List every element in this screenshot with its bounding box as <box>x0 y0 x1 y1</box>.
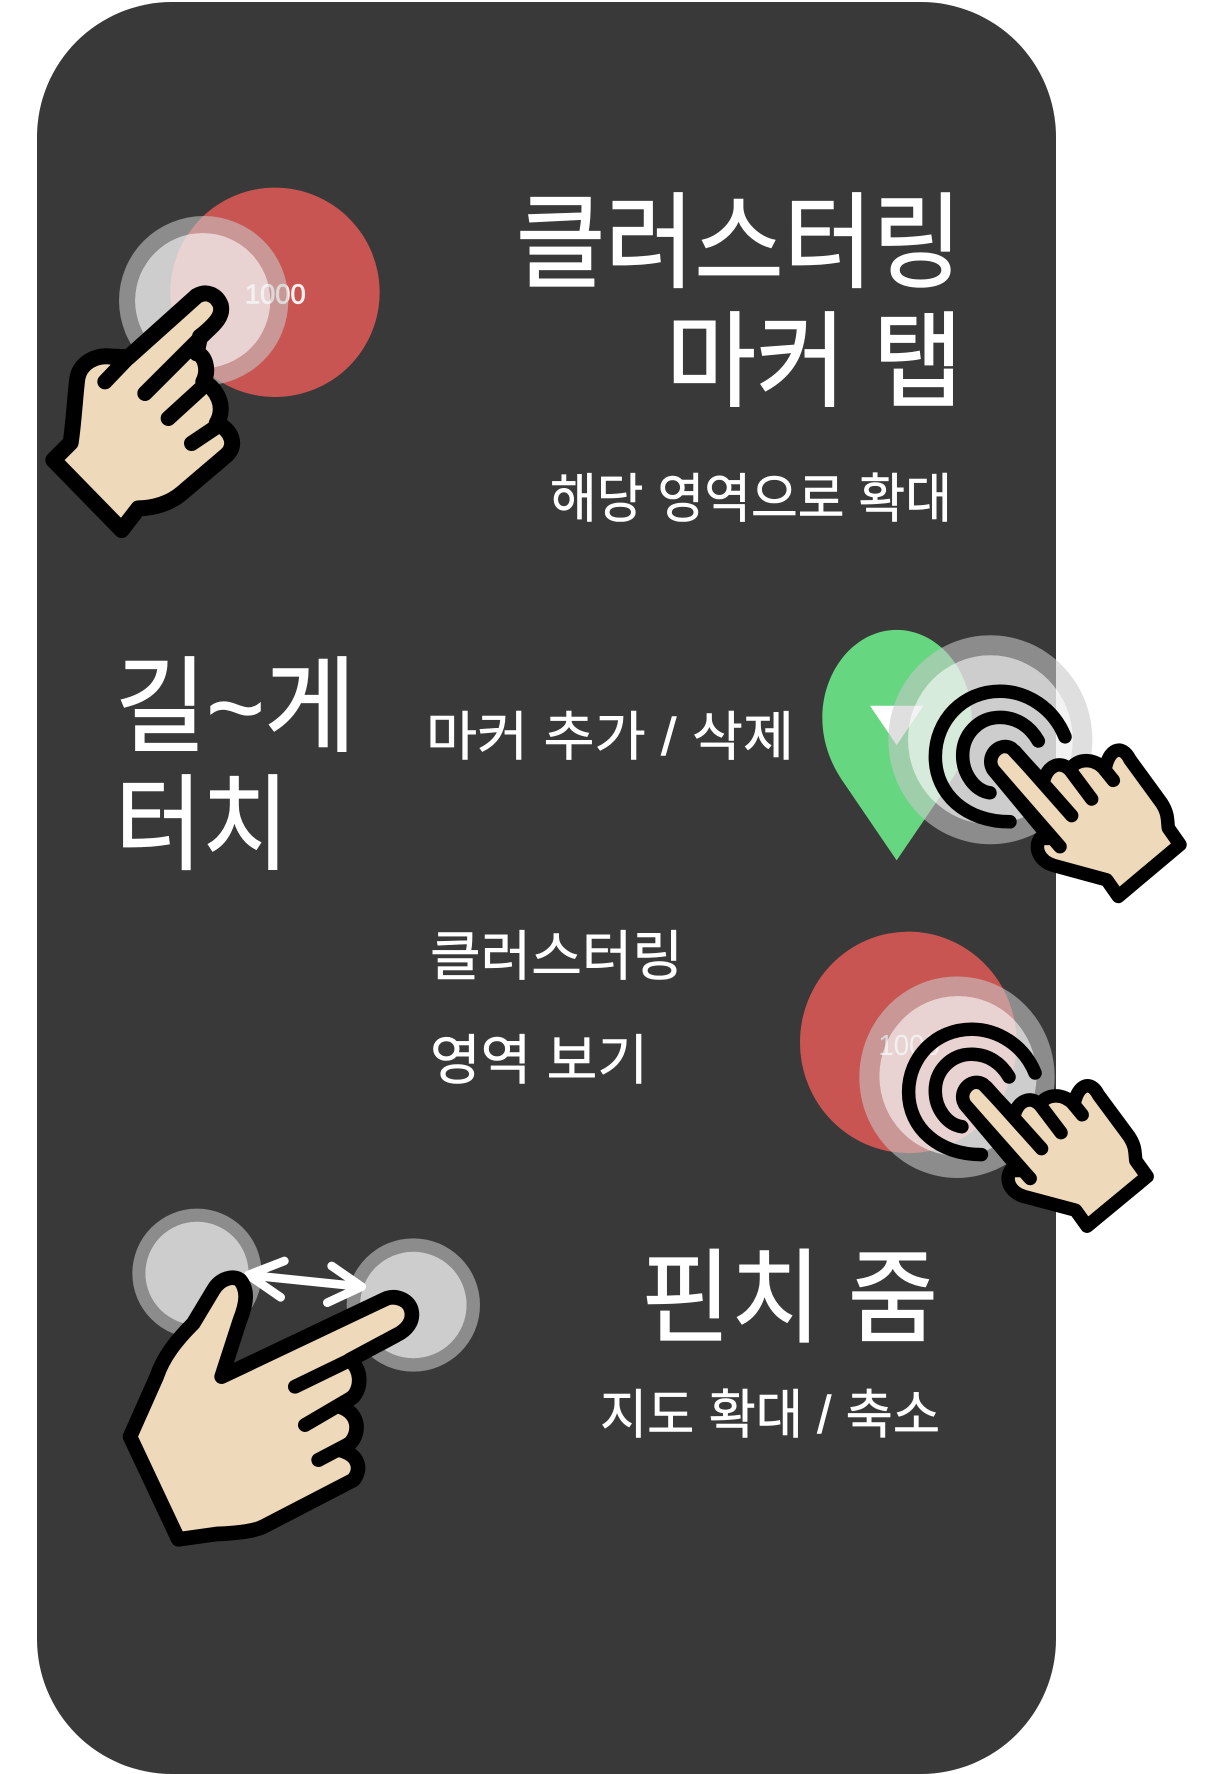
title: long touch: 터치 <box>115 768 289 884</box>
title: pinch zoom: 핀치 줌 <box>641 1242 938 1356</box>
text: view cluster area: 클러스터링 <box>430 927 683 987</box>
pin triangle <box>870 706 923 745</box>
title: long touch: 길~게 <box>115 650 356 766</box>
press ripple arcs <box>935 691 1065 822</box>
right touch point <box>347 1238 480 1372</box>
icon: pinch zoom gesture <box>130 1209 480 1539</box>
pressing hand <box>991 747 1180 896</box>
icon: long press on cluster <box>800 932 1147 1226</box>
touch centre <box>135 233 270 368</box>
text: view cluster area: 영역 보기 <box>430 1031 648 1091</box>
hand <box>130 1278 412 1539</box>
title: cluster marker tap: 클러스터링 <box>516 186 962 302</box>
cluster count: 1000 <box>245 278 306 309</box>
cluster count: 1000 <box>878 1029 940 1062</box>
red cluster marker <box>170 188 380 397</box>
title: long touch <box>115 650 356 884</box>
touch ring <box>888 635 1092 844</box>
red cluster marker <box>800 932 1017 1153</box>
touch centre <box>908 655 1073 824</box>
text: zoom map in or out: 지도 확대 / 축소 <box>600 1386 940 1445</box>
text: view cluster area <box>430 927 683 1091</box>
text: add or delete marker: 마커 추가 / 삭제 <box>426 708 794 767</box>
text: cluster marker tap description: 해당 영역으로 확대 <box>550 470 952 529</box>
title: cluster marker tap: 마커 탭 <box>666 305 963 421</box>
pointing hand <box>53 293 232 530</box>
touch ring <box>119 216 288 385</box>
touch centre <box>879 996 1037 1156</box>
touch ring <box>859 976 1055 1178</box>
left touch point <box>132 1209 262 1338</box>
icon: long press on marker <box>822 630 1180 896</box>
icon: tap on cluster marker <box>53 188 380 530</box>
title: cluster marker tap <box>516 186 963 421</box>
press ripple arcs and hand <box>909 1029 1147 1226</box>
green map pin <box>822 630 972 860</box>
double arrow <box>248 1261 362 1303</box>
